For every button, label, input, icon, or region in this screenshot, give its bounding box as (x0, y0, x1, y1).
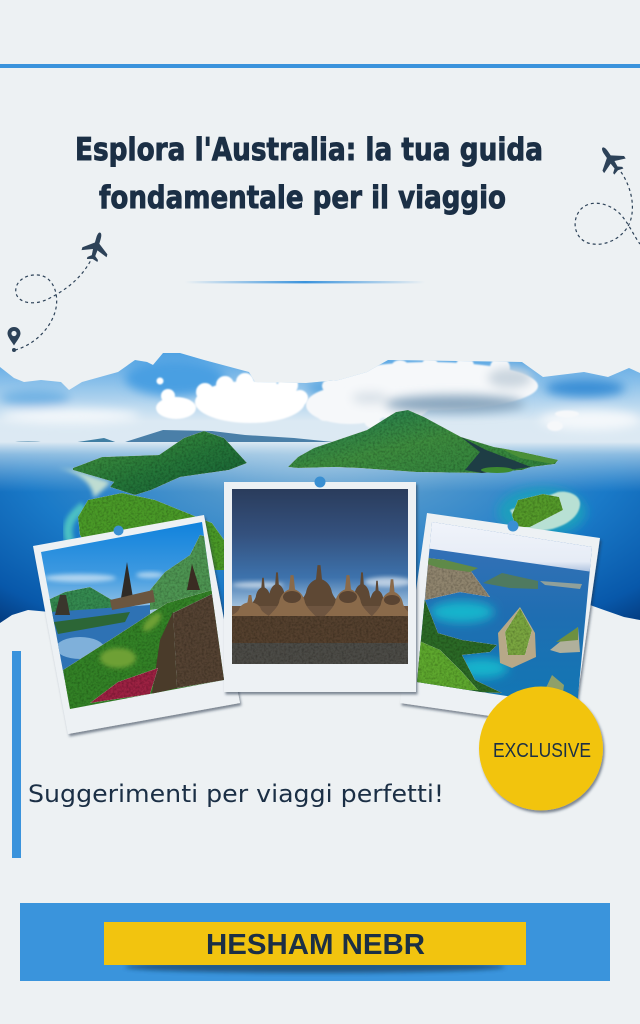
teal shallows (430, 601, 508, 678)
left island (73, 431, 247, 495)
hero landscape: islands and sea (0, 350, 640, 632)
foreground cliffs (417, 593, 502, 693)
pagoda (121, 562, 133, 598)
pin: right card (508, 520, 518, 532)
pin: middle card (314, 476, 326, 488)
sea (0, 442, 640, 632)
photo card: Borobudur stupas (middle) (224, 482, 416, 692)
distant hills (16, 430, 332, 442)
photo card: temple by the lake (left) (30, 515, 240, 734)
exclusive badge: EXCLUSIVE (493, 740, 591, 762)
stone wall (232, 616, 408, 643)
vertical accent bar (12, 651, 21, 858)
author banner: HESHAM NEBR (206, 929, 425, 961)
tagline: Suggerimenti per viaggi perfetti! (28, 780, 444, 808)
stone floor (232, 643, 408, 664)
photo card: island bay (right) (400, 513, 600, 728)
small right island (498, 488, 586, 536)
clouds (156, 357, 579, 431)
garden bank (63, 590, 224, 712)
pin: left card (114, 526, 124, 536)
beach left (58, 468, 110, 542)
title: fondamentale per il viaggio (99, 180, 506, 216)
top blue rule (0, 64, 640, 68)
exclusive badge (479, 686, 603, 810)
icon: left flight path with plane and pin (8, 229, 113, 352)
icon: right flight path with plane (575, 140, 640, 244)
lake (50, 605, 150, 680)
stupas (252, 565, 384, 606)
title (75, 132, 543, 216)
lower left island (78, 493, 224, 570)
divider under title (185, 281, 425, 283)
sky (0, 350, 640, 445)
garden path (173, 594, 225, 688)
title: Esplora l'Australia: la tua guida (75, 132, 543, 168)
hills (48, 535, 222, 626)
rock stack (498, 607, 536, 668)
author banner (20, 903, 610, 981)
right island (288, 410, 558, 473)
red flowers (90, 668, 158, 703)
